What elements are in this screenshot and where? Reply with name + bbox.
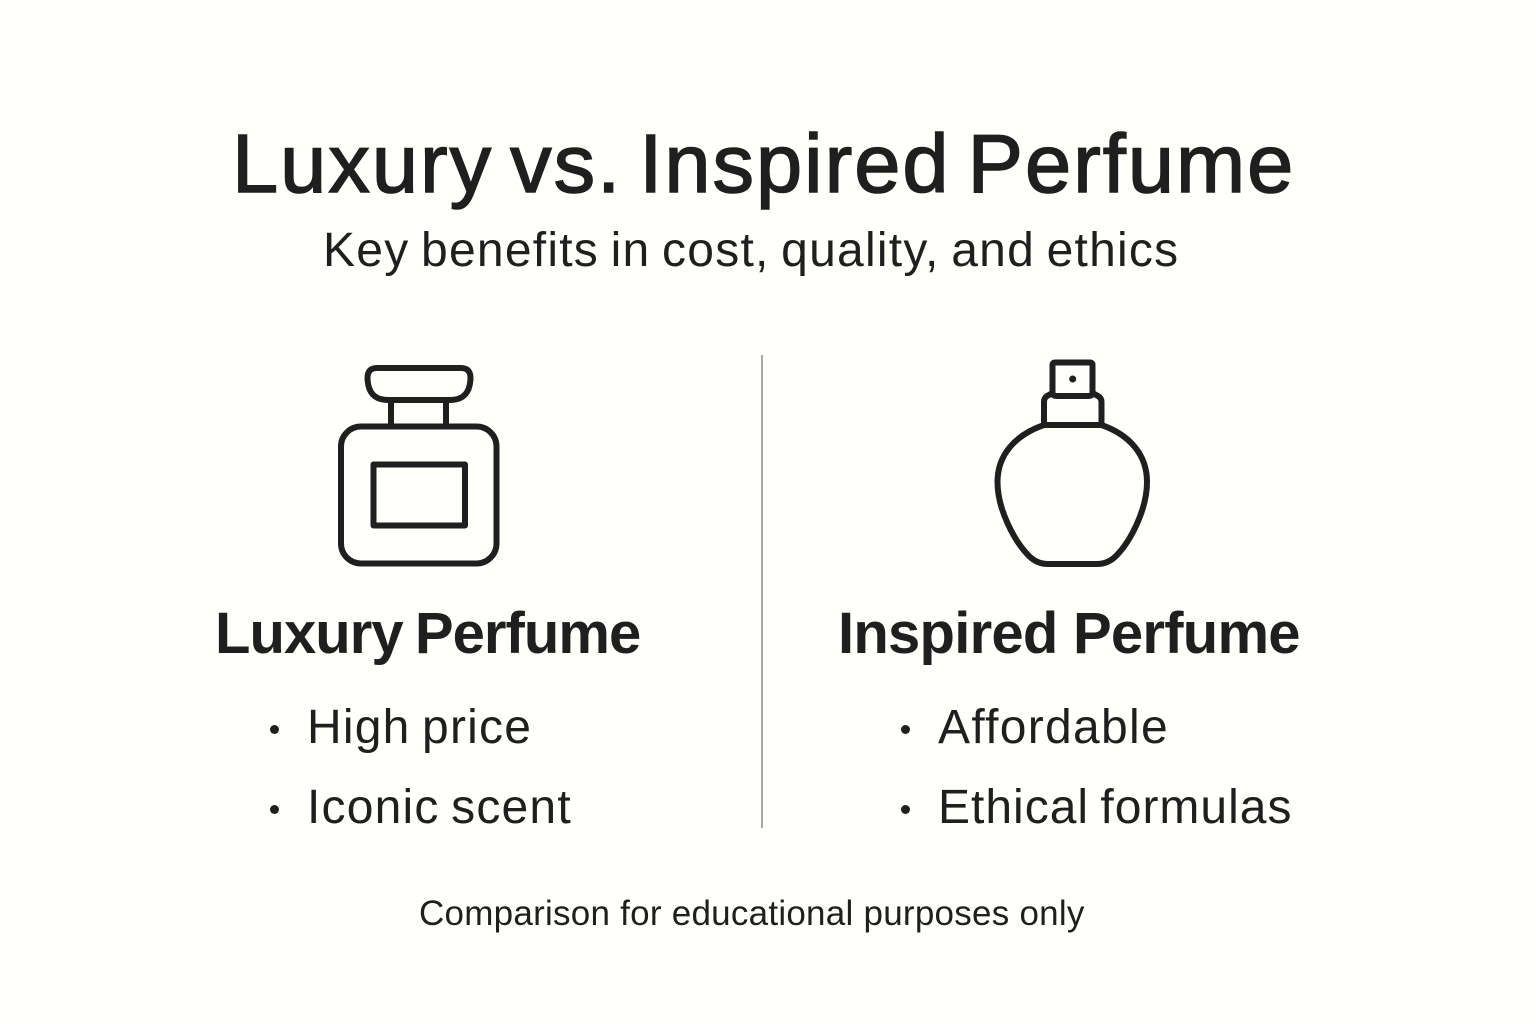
icon: luxury perfume bottle	[338, 365, 500, 566]
divider	[761, 355, 763, 828]
bullet: affordable: Affordable	[938, 701, 1169, 754]
icon: inspired perfume bottle	[994, 360, 1150, 567]
footnote: Comparison for educational purposes only	[419, 894, 1085, 933]
heading: inspired perfume: Inspired Perfume	[838, 601, 1300, 666]
title: Luxury vs. Inspired Perfume	[232, 117, 1295, 210]
bullet: high price: High price	[307, 701, 532, 754]
subtitle: Key benefits in cost, quality, and ethics	[323, 224, 1179, 277]
list: luxury perfume points	[270, 701, 572, 834]
bullet: iconic scent: Iconic scent	[307, 781, 572, 834]
bullet: ethical formulas: Ethical formulas	[938, 781, 1292, 834]
heading: luxury perfume: Luxury Perfume	[215, 601, 640, 666]
list: inspired perfume points	[901, 701, 1292, 834]
